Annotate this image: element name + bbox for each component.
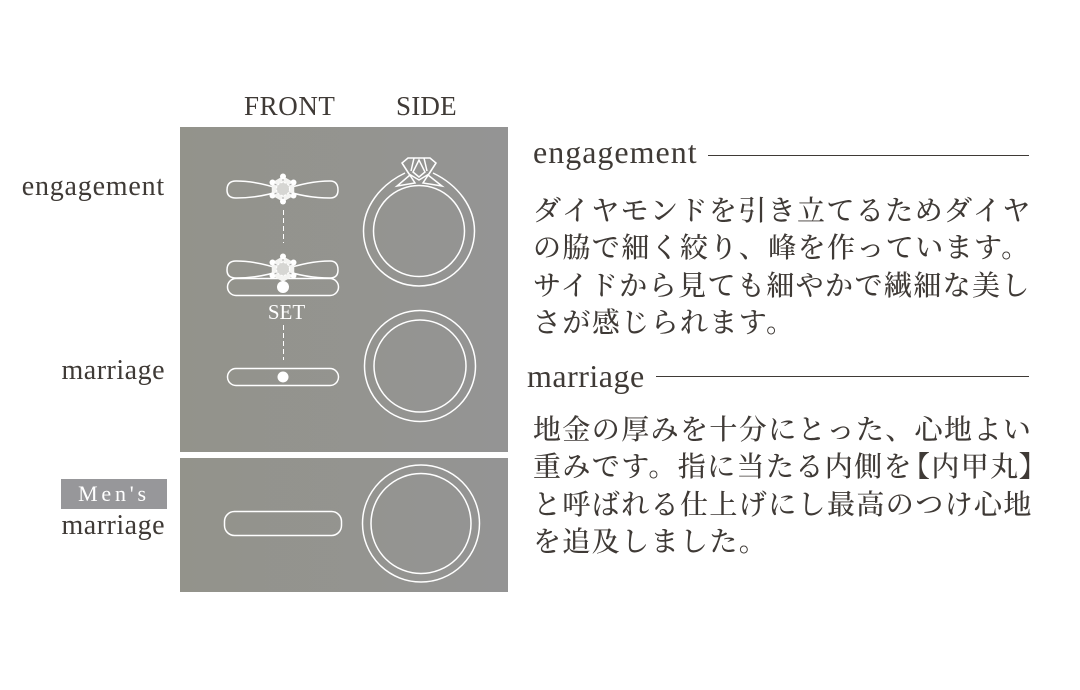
text block: engagement description: ダイヤモンドを引き立てるためダイヤ — [533, 189, 1032, 229]
text block: marriage description: 地金の厚みを十分にとった、心地よい — [533, 408, 1032, 448]
row label: engagement: engagement — [22, 171, 165, 202]
row label: marriage: marriage — [62, 355, 165, 386]
text block: engagement description: さが感じられます。 — [533, 301, 795, 341]
text block: marriage description: を追及しました。 — [533, 520, 768, 560]
icon: men's ring front — [224, 512, 342, 536]
badge: Men's — [61, 479, 167, 509]
icon: marriage ring side — [364, 310, 476, 422]
panel: engagement and marriage rings — [180, 127, 508, 452]
text block: marriage description — [533, 408, 1048, 560]
icon: marriage ring front — [228, 368, 338, 386]
icon: engagement ring side — [364, 158, 474, 286]
heading: marriage: marriage — [527, 358, 645, 394]
column heading: SIDE: SIDE — [396, 91, 457, 121]
heading: engagement: engagement — [533, 134, 698, 170]
panel: men's ring — [180, 458, 508, 592]
column heading: FRONT: FRONT — [244, 91, 336, 121]
icon: set rings front — [227, 254, 338, 296]
connector: set to marriage — [282, 325, 284, 360]
text block: engagement description: の脇で細く絞り、峰を作っています。 — [533, 226, 1031, 266]
text block: engagement description — [533, 189, 1032, 341]
icon: engagement ring front — [227, 174, 338, 204]
badge: Men's: Men's — [78, 481, 150, 506]
row label: Men's marriage: marriage — [62, 510, 165, 541]
connector: engagement to set — [282, 210, 284, 243]
text block: engagement description: サイドから見ても細やかで繊細な美し — [533, 264, 1031, 304]
text block: marriage description: 重みです。指に当たる内側を【内甲丸】 — [533, 445, 1048, 485]
icon: men's ring side — [362, 465, 480, 582]
label: SET: SET — [268, 300, 305, 324]
text block: marriage description: と呼ばれる仕上げにし最高のつけ心地 — [533, 483, 1033, 523]
